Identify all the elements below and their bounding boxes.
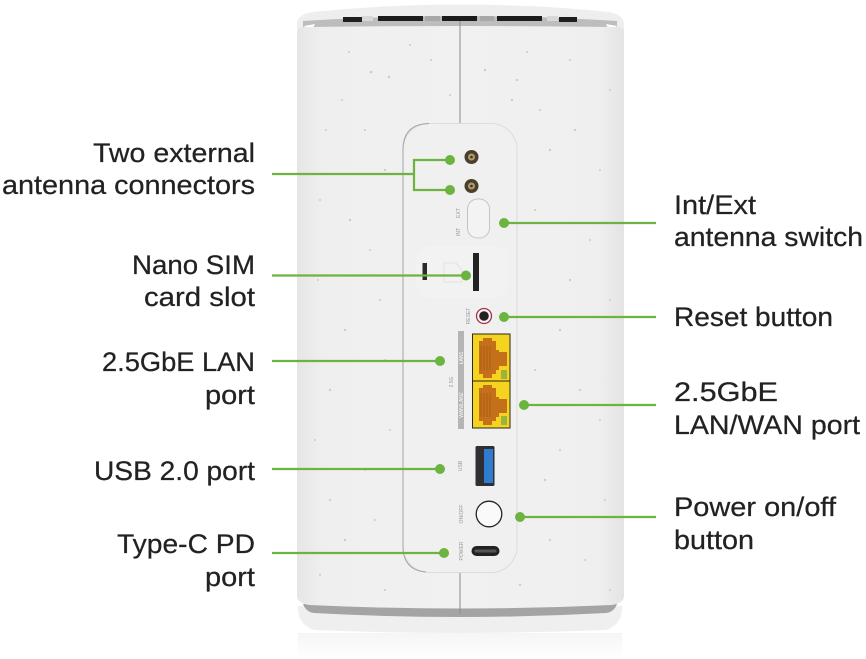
callout: 2.5GbE LAN/WAN port	[519, 377, 861, 440]
top cap	[297, 4, 624, 32]
callout: int/ext antenna switch: Int/Ext	[674, 190, 757, 220]
lan port labels	[449, 331, 465, 429]
base plate	[298, 606, 622, 633]
sim slot	[422, 253, 479, 291]
callout: two external antenna connectors	[2, 138, 455, 200]
callout: 2.5GbE LAN port: port	[205, 380, 256, 410]
lan port labels: LAN1	[459, 352, 465, 364]
callout: type-c pd port: Type-C PD	[117, 529, 255, 559]
int/ext switch: INT	[456, 228, 462, 236]
callout: nano sim card slot: card slot	[144, 282, 256, 312]
callout: power on/off button	[515, 492, 837, 555]
callout: reset button	[499, 302, 833, 332]
center seam top	[459, 21, 461, 123]
callout: 2.5GbE LAN port: 2.5GbE LAN	[102, 347, 255, 377]
callout: 2.5GbE LAN port	[102, 347, 445, 410]
callout: type-c pd port	[117, 529, 449, 592]
usb port: USB	[458, 460, 464, 471]
router device	[297, 4, 624, 659]
antenna connector bottom	[464, 179, 478, 193]
callout: nano sim card slot: Nano SIM	[132, 250, 255, 280]
reset button: RESET	[466, 308, 472, 324]
callout: power on/off button: button	[674, 525, 754, 555]
callout: int/ext antenna switch: antenna switch	[674, 222, 863, 252]
antenna connector top	[464, 150, 478, 164]
callout: two external antenna connectors: Two external	[93, 138, 255, 168]
base reflection	[298, 633, 622, 659]
int/ext switch: EXT	[456, 208, 462, 218]
usb-c port	[459, 541, 500, 560]
port panel	[403, 124, 517, 572]
callout: usb 2.0 port	[94, 456, 445, 486]
power button: ON/OFF	[459, 505, 465, 523]
top vents	[303, 16, 617, 32]
callout: usb 2.0 port: USB 2.0 port	[94, 456, 256, 486]
callout: reset button: Reset button	[674, 302, 833, 332]
body speckles	[314, 44, 611, 591]
callout: 2.5GbE LAN/WAN port: LAN/WAN port	[674, 410, 861, 440]
usb port	[458, 446, 494, 486]
callout: nano sim card slot	[132, 250, 471, 312]
lan port labels: WAN/LAN2	[459, 392, 465, 418]
callout: two external antenna connectors: antenna connectors	[2, 170, 255, 200]
callout: 2.5GbE LAN/WAN port: 2.5GbE	[674, 377, 778, 407]
reset button	[466, 308, 492, 324]
panel left edge	[403, 124, 429, 572]
power button	[459, 501, 502, 527]
base shadow gap	[303, 604, 617, 617]
callout: type-c pd port: port	[205, 562, 256, 592]
usb-c port: POWER	[459, 541, 465, 560]
center seam bottom	[459, 572, 461, 614]
callout: power on/off button: Power on/off	[674, 492, 837, 522]
sim card cover	[416, 246, 508, 298]
main body	[297, 26, 624, 608]
ethernet ports	[472, 334, 510, 428]
lan port labels: 2.5G	[449, 376, 455, 387]
callout: int/ext antenna switch	[499, 190, 863, 252]
int/ext switch	[456, 199, 490, 238]
